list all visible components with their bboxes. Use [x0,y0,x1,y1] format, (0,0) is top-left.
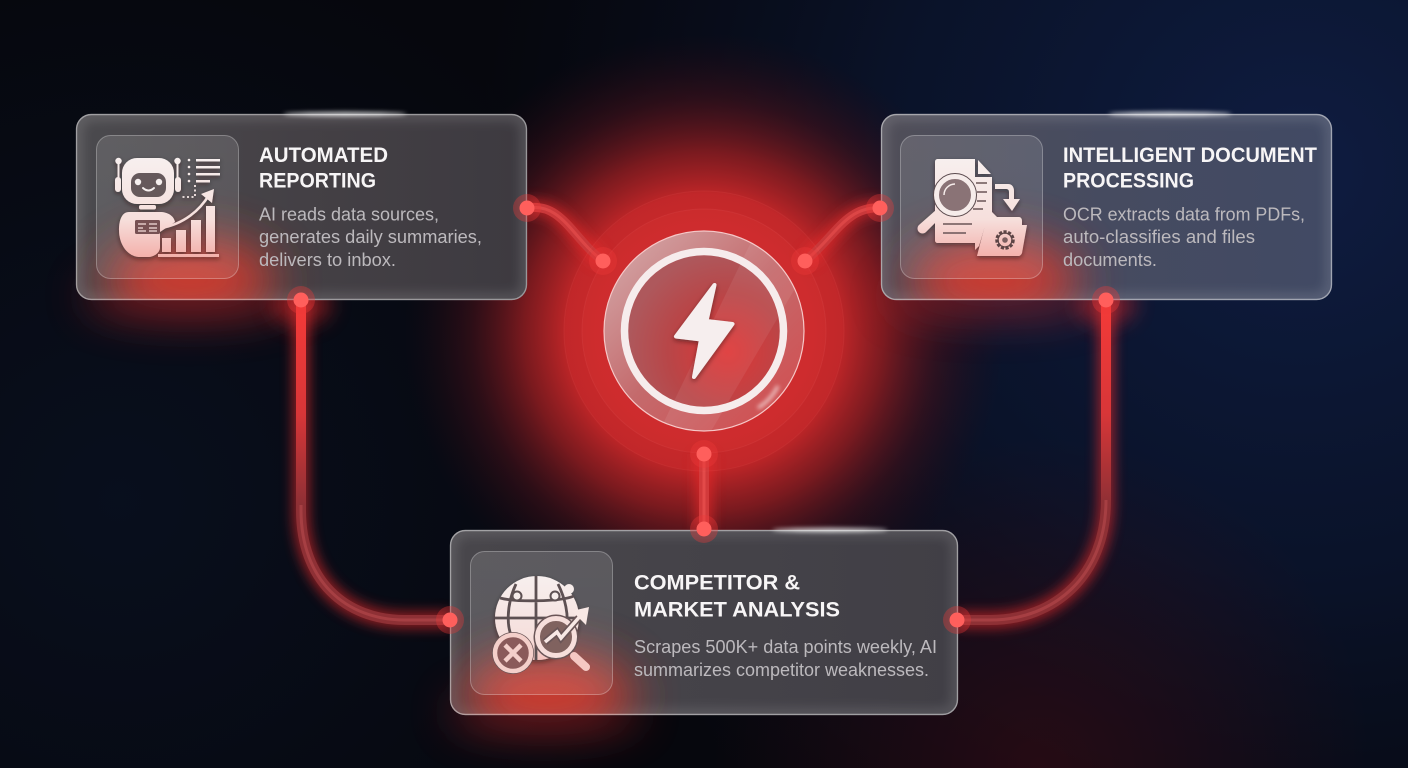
connector: automated reporting to hub [527,207,603,261]
description: AI reads data sources, [259,204,439,224]
heading: REPORTING [259,170,376,192]
panel surface [450,528,958,737]
node: document left [866,194,894,222]
heading: INTELLIGENT DOCUMENT [1063,144,1317,167]
node: hub bottom [690,440,718,468]
heading: AUTOMATED [259,144,388,167]
panel glows [85,274,1136,732]
node: competitor left [436,606,464,634]
panel: automated reporting [76,112,527,322]
panel surface [881,112,1332,322]
glass disc [604,231,804,450]
node: competitor top [690,515,718,543]
panel surface [76,112,527,322]
panel: intelligent document processing [881,112,1332,322]
heading [259,144,388,192]
description [259,204,482,270]
central hub glow [404,32,1004,632]
connector: document processing to competitor analysis [957,300,1106,620]
connection nodes [287,194,1120,634]
connector: automated reporting to competitor analysis [301,300,450,620]
heading: MARKET ANALYSIS [634,598,840,622]
heading [1063,144,1317,192]
halo rings [564,191,844,471]
node: document bottom [1092,286,1120,314]
description: delivers to inbox. [259,250,396,270]
icon: lightning bolt [676,285,732,377]
description: documents. [1063,250,1157,270]
description: Scrapes 500K+ data points weekly, AI [634,637,937,657]
description: OCR extracts data from PDFs, [1063,204,1305,224]
connector: hub to competitor analysis [695,454,713,529]
node: reporting bottom [287,286,315,314]
central hub: lightning bolt badge [564,191,844,471]
description: auto-classifies and files [1063,227,1255,247]
description: summarizes competitor weaknesses. [634,660,929,680]
node: reporting right [513,194,541,222]
description [634,637,937,680]
node: hub upper left [589,247,617,275]
icon tile: globe with trend magnifier [470,552,612,694]
heading: COMPETITOR & [634,572,800,594]
node: hub upper right [791,247,819,275]
icon tile: document search and folder [900,136,1042,278]
node: competitor right [943,606,971,634]
heading [634,572,840,622]
heading: PROCESSING [1063,170,1194,192]
connector lines [301,207,1106,620]
panel: competitor and market analysis [450,528,958,737]
description [1063,204,1305,270]
connector: document processing to hub [805,208,880,261]
description: generates daily summaries, [259,227,482,247]
icon tile: robot with chart [96,136,238,278]
